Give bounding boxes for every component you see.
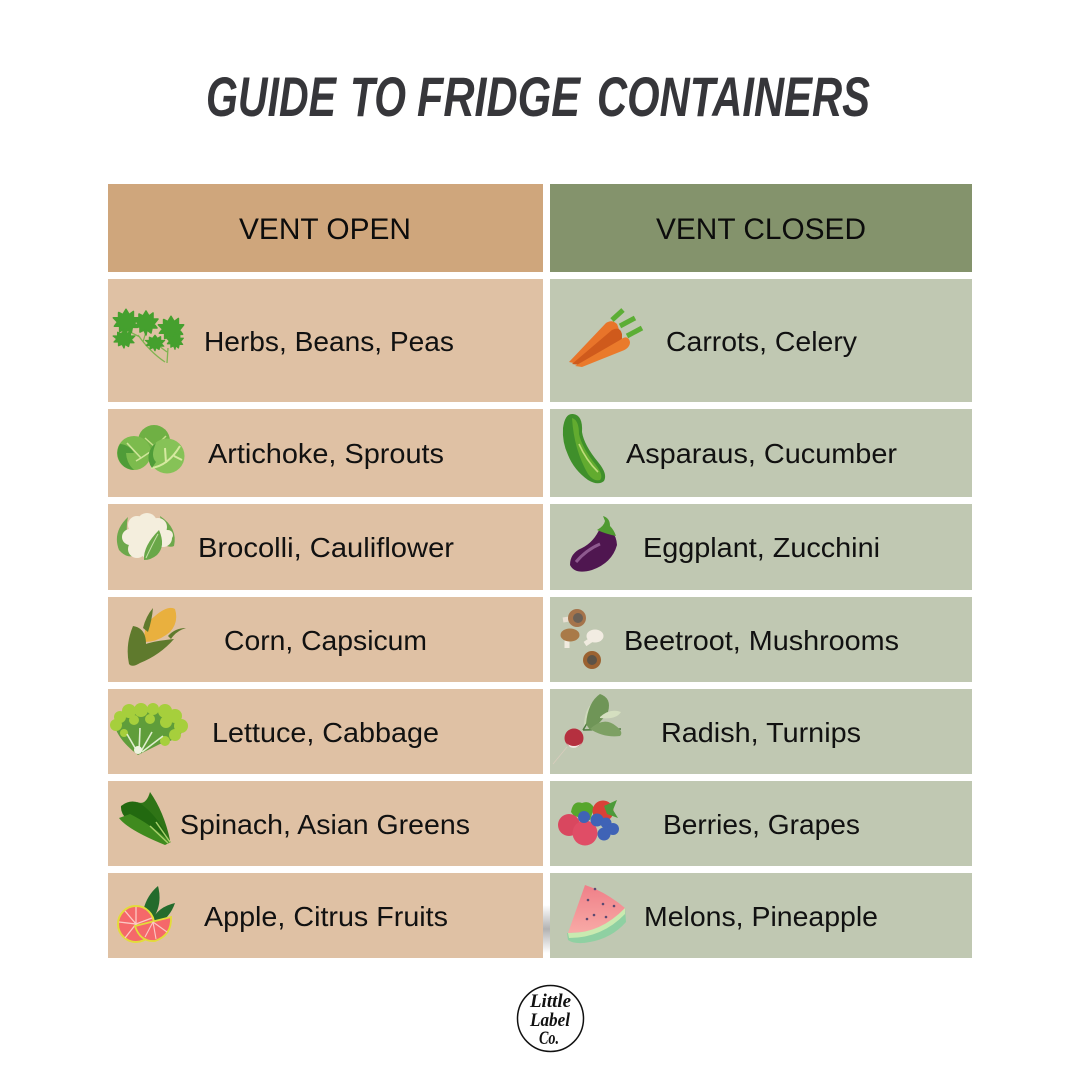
- label: Carrots, Celery: [666, 326, 857, 357]
- label: Lettuce, Cabbage: [212, 717, 439, 748]
- title: CONTAINERS: [597, 65, 870, 128]
- row: beetroot, mushrooms: [550, 597, 972, 682]
- icon: lettuce: [110, 703, 188, 755]
- icon: parsley: [113, 309, 184, 363]
- label: Asparaus, Cucumber: [626, 438, 897, 469]
- label: Melons, Pineapple: [644, 901, 878, 932]
- row: herbs, beans, peas: [108, 279, 543, 402]
- label: Spinach, Asian Greens: [180, 809, 470, 840]
- row: lettuce, cabbage: [108, 689, 543, 774]
- icon: radish: [553, 694, 621, 764]
- label: Artichoke, Sprouts: [208, 438, 444, 469]
- row: corn, capsicum: [108, 597, 543, 682]
- title: GUIDE: [206, 65, 337, 128]
- label: Berries, Grapes: [663, 809, 860, 840]
- label: Apple, Citrus Fruits: [204, 901, 448, 932]
- icon: eggplant: [570, 516, 617, 572]
- row: apple, citrus fruits: [108, 873, 543, 958]
- icon: carrots: [569, 310, 642, 367]
- header: vent closed: VENT CLOSED: [656, 213, 866, 246]
- label: Radish, Turnips: [661, 717, 861, 748]
- row: radish, turnips: [550, 689, 972, 774]
- header: vent open: [108, 184, 543, 272]
- label: Corn, Capsicum: [224, 625, 427, 656]
- label: Eggplant, Zucchini: [643, 532, 880, 563]
- icon: spinach: [119, 792, 171, 845]
- logo: little label co: Label: [529, 1010, 571, 1031]
- row: asparaus, cucumber: [550, 409, 972, 497]
- logo: little label co: Co.: [539, 1028, 559, 1049]
- label: Brocolli, Cauliflower: [198, 532, 454, 563]
- label: Herbs, Beans, Peas: [204, 326, 454, 357]
- row: spinach, asian greens: [108, 781, 543, 866]
- logo: little label co: [518, 986, 584, 1052]
- icon: watermelon: [567, 885, 626, 943]
- icon: cucumber: [563, 414, 605, 483]
- icon: mushrooms: [560, 609, 604, 669]
- label: Beetroot, Mushrooms: [624, 625, 899, 656]
- title: TO: [350, 65, 406, 128]
- panel: vent closed column: [550, 184, 972, 958]
- row: brocolli, cauliflower: [108, 504, 543, 590]
- title: FRIDGE: [417, 65, 581, 128]
- icon: grapefruit: [118, 886, 175, 942]
- logo: little label co: Little: [529, 991, 572, 1012]
- row: artichoke, sprouts: [108, 409, 543, 497]
- icon: corn: [128, 608, 186, 666]
- header: vent open: VENT OPEN: [239, 213, 411, 246]
- panel: vent open column: [108, 184, 543, 958]
- header: vent closed: [550, 184, 972, 272]
- icon: brussels sprouts: [117, 425, 184, 474]
- row: melons, pineapple: [550, 873, 972, 958]
- title: [206, 65, 870, 128]
- row: berries, grapes: [550, 781, 972, 866]
- row: eggplant, zucchini: [550, 504, 972, 590]
- icon: berries: [558, 800, 619, 846]
- icon: cauliflower: [117, 513, 175, 560]
- row: carrots, celery: [550, 279, 972, 402]
